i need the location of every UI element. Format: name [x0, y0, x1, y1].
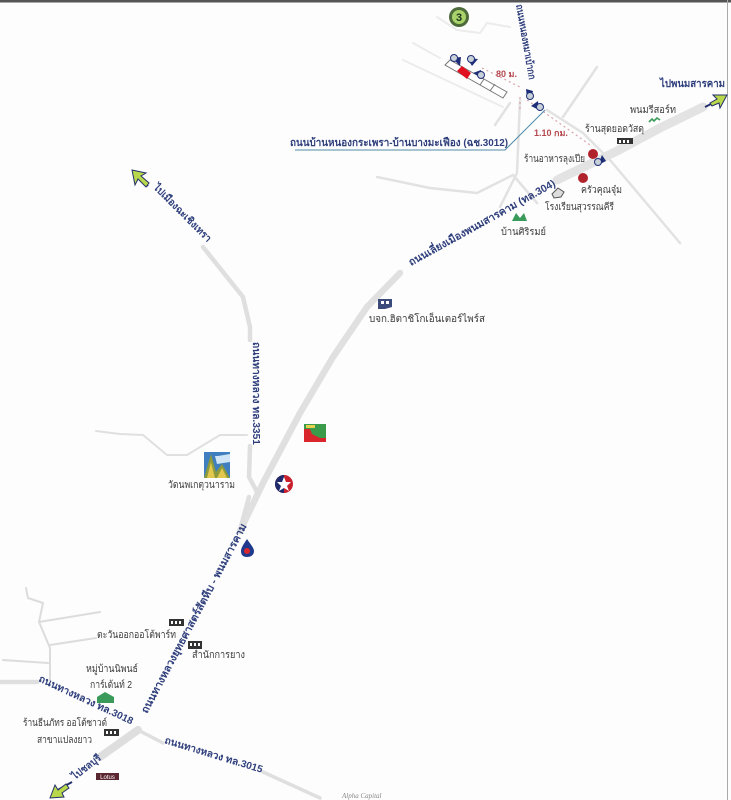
- label: Thin Phat Auto: ร้านธีนภัทร ออโต้ซาวด์: [23, 716, 107, 729]
- north lanes: [377, 100, 537, 207]
- road 3015: [138, 730, 320, 798]
- label: bypass road 304: ถนนเลี่ยงเมืองพนมสารคาม (ทล.304): [405, 175, 558, 269]
- label: road 3351: ถนนทางหลวง ทล.3351: [250, 342, 261, 445]
- label: school: โรงเรียนสุวรรณคีรี: [545, 200, 615, 213]
- label: to Chonburi: ไปชลบุรี: [68, 751, 104, 783]
- icon: site marker 3: 3: [456, 12, 462, 24]
- icon: Caltex star: [275, 475, 293, 493]
- icon: PTT flame: [241, 539, 254, 557]
- label: highway Sattahip - Phanom Sarakham: ถนนทางหลวงยุทธศาสตร์สัตหีบ - พนมสารคาม: [138, 521, 251, 716]
- label: hardware shop: ร้านสุดยอดวัสดุ: [585, 123, 644, 135]
- label: restaurant: [524, 149, 598, 165]
- label: Tawan Ok Auto Part: ตะวันออกออโต้พาร์ท: [97, 628, 176, 641]
- label: Tawan Ok Auto Part: [97, 619, 184, 641]
- label: road 3018: ถนนทางหลวง ทล.3018: [37, 674, 135, 727]
- label: Phanom Resort: พนมรีสอร์ท: [630, 104, 676, 116]
- callout: road 3012 leader line: [295, 110, 545, 150]
- label: school: [545, 188, 615, 213]
- arrow: to Chachoengsao: [132, 170, 149, 187]
- label: road 3012: ถนนบ้านหนองกระเพรา-บ้านบางมะเฟือง (ฉช.3012): [290, 136, 508, 149]
- label: Thin Phat Auto: [23, 716, 119, 746]
- icon: location pins: [450, 54, 606, 166]
- site plots: [445, 60, 507, 98]
- label: Thin Phat Auto: สาขาแปลงยาว: [37, 735, 92, 746]
- label: Khrua Khun Jum: ครัวคุณจุ๋ม: [581, 184, 622, 196]
- side road to temple: [96, 431, 247, 455]
- icon: Lotus shop sign: Lotus: [100, 775, 115, 781]
- label: hardware shop: [585, 123, 644, 144]
- icon: green-red logo: [304, 424, 326, 442]
- label: road 3015: ถนนทางหลวง ทล.3015: [163, 735, 264, 776]
- label: to Chachoengsao: ไปเมืองฉะเชิงเทรา: [150, 180, 215, 245]
- label: Khrua Khun Jum: [578, 173, 622, 196]
- label: temple: วัดนพเกตุวนาราม: [168, 480, 235, 491]
- label: Rubber office: สำนักการยาง: [192, 650, 245, 661]
- west lanes: [3, 588, 100, 680]
- label: village: การ์เด้นท์ 2: [90, 679, 132, 691]
- watermark: Alpha Capital: [341, 792, 382, 800]
- icon: Lotus shop sign: [96, 773, 119, 781]
- label: Rubber office: [188, 641, 245, 661]
- label: to Phanom Sarakham: ไปพนมสารคาม: [659, 77, 725, 90]
- label: Ban Siri Rom: [501, 213, 546, 238]
- icon: site marker 3: [449, 7, 469, 27]
- label: restaurant: ร้านอาหารลุงเปีย: [524, 153, 585, 165]
- label: Siam Kubota office: [369, 299, 485, 325]
- road 3018: [0, 680, 37, 684]
- label: Phanom Resort: [630, 104, 676, 122]
- label: 80 m: 80 ม.: [496, 69, 517, 79]
- label: Ban Siri Rom: บ้านศิริรมย์: [501, 226, 546, 238]
- arrow: to Chonburi: [50, 782, 72, 798]
- icon: temple: [204, 452, 230, 478]
- main road: north-east section: [557, 107, 703, 180]
- label: Siam Kubota office: บจก.ฮิตาชิโกเอ็นเตอร์ไพร์ส: [369, 311, 485, 325]
- arrow: to Phanom Sarakham: [705, 95, 727, 108]
- label: village: [86, 663, 138, 703]
- road 3351: [203, 247, 257, 530]
- main road: south of junction: [100, 730, 138, 757]
- label: village: หมู่บ้านนิพนธ์: [86, 663, 138, 675]
- distance dotted route: [482, 68, 590, 145]
- label: 1.10 km: 1.10 กม.: [534, 128, 568, 138]
- label: road north: ถนนหนองหมาเบ้ากก: [513, 3, 538, 80]
- main road: central curve: [240, 273, 400, 531]
